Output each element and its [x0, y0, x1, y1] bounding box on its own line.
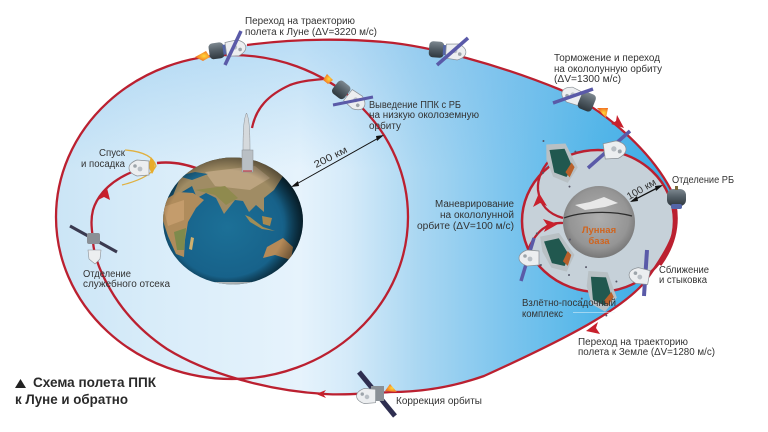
lander: bottom	[578, 264, 620, 319]
label: descent and landing	[81, 148, 126, 170]
return trajectory	[92, 172, 676, 394]
spacecraft 1: translunar injection	[195, 31, 247, 65]
orbiter: rendezvous	[628, 250, 650, 296]
label: low earth orbit insertion: на низкую околоземную	[369, 110, 479, 121]
label: descent and landing: и посадка	[81, 159, 125, 170]
title: к Луне и обратно	[15, 391, 128, 407]
ascent trajectory	[252, 79, 323, 128]
label: lunar orbit maneuvering: на окололунной	[440, 210, 514, 221]
earth orbit	[56, 55, 408, 379]
label: low earth orbit insertion: Выведение ППК с РБ	[369, 100, 461, 111]
spacecraft 6: separated stage	[667, 186, 686, 209]
label: trans-earth injection	[578, 337, 715, 358]
moon base label: база	[588, 236, 610, 247]
label: translunar injection: полета к Луне (ΔV=3220 м/с)	[245, 27, 377, 38]
distance: 200 km: 200 км	[312, 145, 350, 171]
label: landing complex: комплекс	[522, 309, 563, 320]
label: braking: Торможение и переход	[554, 53, 660, 64]
right thick arc near the moon	[660, 190, 676, 265]
spacecraft: orbit correction	[357, 372, 397, 416]
southeast asia	[245, 215, 275, 231]
translunar trajectory	[247, 40, 671, 190]
lander and orbiter: left	[519, 222, 582, 284]
label: rendezvous and docking: и стыковка	[659, 275, 707, 286]
spacecraft 4: braking	[553, 83, 608, 118]
madagascar	[189, 237, 194, 250]
title	[15, 374, 156, 407]
eurasia	[172, 155, 283, 214]
label: landing complex: Взлётно-посадочный	[522, 298, 616, 309]
label: landing complex	[522, 298, 616, 320]
rocket	[242, 113, 253, 172]
label: low earth orbit insertion	[369, 100, 479, 132]
background: blue trajectory area	[57, 40, 675, 394]
distance: 100 km: 100 км	[625, 177, 658, 203]
label: descent and landing: Спуск	[99, 148, 126, 159]
maneuver paths	[527, 157, 563, 252]
spacecraft: service module separation	[70, 226, 117, 264]
label: low earth orbit insertion: орбиту	[369, 120, 401, 132]
label: lunar orbit maneuvering: орбите (ΔV=100 м/с)	[417, 220, 514, 232]
label: service module separation: служебного отсека	[83, 278, 170, 290]
title: Схема полета ППК	[33, 374, 156, 390]
earth	[160, 155, 303, 290]
arrowheads	[98, 115, 624, 398]
label: lunar orbit maneuvering: Маневрирование	[435, 199, 514, 210]
label: trans-earth injection: полета к Земле (ΔV=1280 м/с)	[578, 347, 715, 358]
label: translunar injection: Переход на траекторию	[245, 16, 355, 27]
spacecraft 5: orbiter on lunar orbit	[588, 131, 630, 168]
moon base label: Лунная	[582, 225, 616, 236]
moon base label	[582, 225, 616, 247]
label: orbit correction: Коррекция орбиты	[396, 395, 482, 407]
label: stage separation: Отделение РБ	[672, 175, 734, 186]
label: braking: (ΔV=1300 м/с)	[554, 74, 621, 85]
label: service module separation: Отделение	[83, 269, 131, 280]
label: rendezvous and docking	[659, 264, 709, 286]
reentry capsule with shield	[122, 150, 156, 185]
antarctica edge	[215, 282, 252, 284]
moon	[563, 186, 635, 258]
label: rendezvous and docking: Сближение	[659, 264, 709, 276]
lunar orbit disc	[522, 150, 674, 292]
spacecraft 3: midcourse	[428, 38, 468, 65]
lunar orbit	[522, 150, 674, 292]
label: braking	[554, 53, 662, 85]
label: translunar injection	[245, 16, 377, 38]
distance: 200 km	[291, 135, 384, 187]
australia	[263, 238, 293, 260]
label: braking: на окололунную орбиту	[554, 63, 662, 75]
label: trans-earth injection: Переход на траекторию	[578, 337, 688, 348]
label: service module separation	[83, 269, 170, 290]
reentry trajectory	[157, 162, 212, 174]
lander: top	[535, 134, 583, 193]
label: lunar orbit maneuvering	[417, 199, 514, 232]
spacecraft 2: low earth orbit	[323, 74, 373, 114]
africa	[160, 192, 204, 257]
